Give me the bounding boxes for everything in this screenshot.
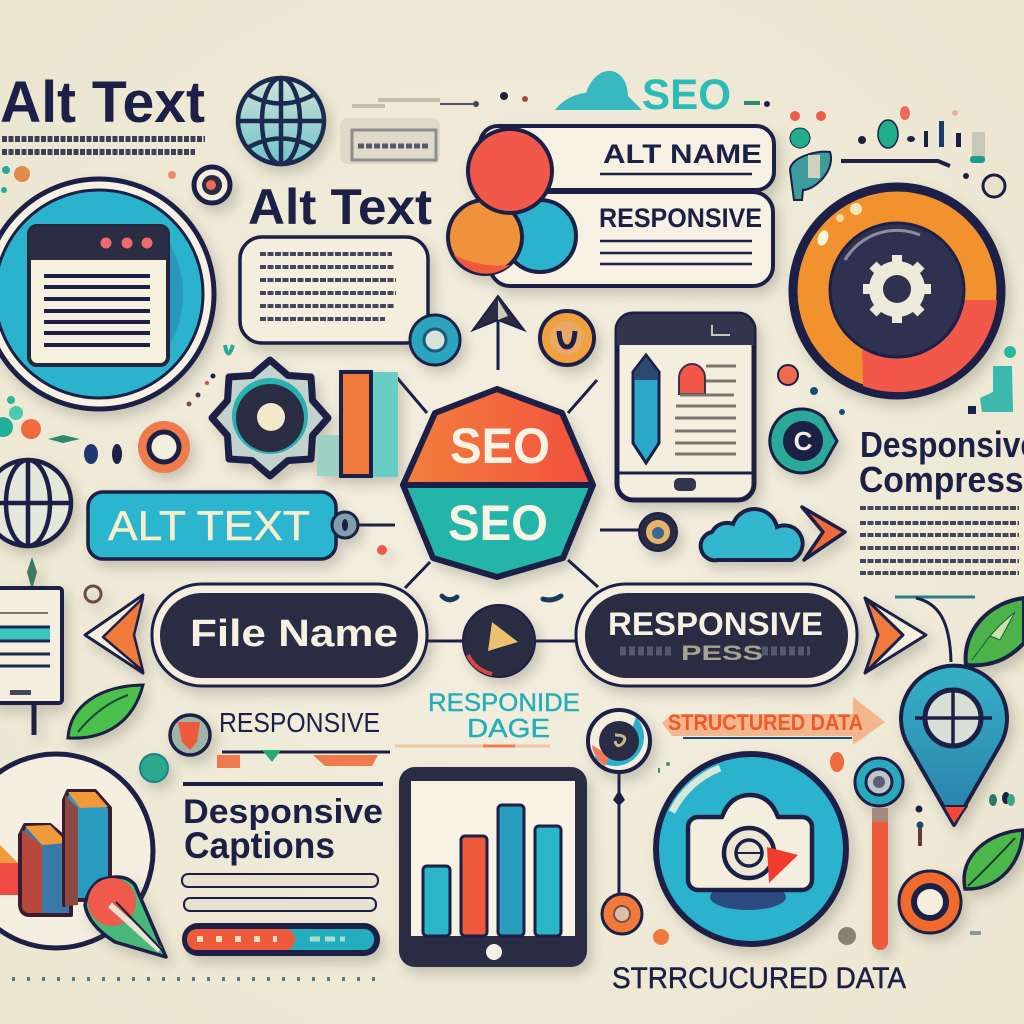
- icon: small ring: [194, 167, 230, 203]
- heading: Desponsive Captions: Captions: [184, 825, 335, 866]
- small blurred label top: [340, 100, 440, 164]
- connector lines: [357, 104, 640, 895]
- document left: [0, 557, 62, 735]
- heading: Desponsive Compression right: [859, 424, 1024, 573]
- dots right: [778, 346, 1016, 415]
- icon: teal C circle: C: [794, 426, 813, 456]
- icon: gear left: [212, 360, 328, 476]
- pill: Responsive: PESS: [681, 642, 763, 665]
- decorative cluster top right: [790, 106, 1005, 200]
- icon: orange ring left: [84, 421, 190, 473]
- icon: leaf left: [68, 685, 143, 738]
- heading: Alt Text top left: Alt Text: [0, 70, 205, 135]
- icon: gear in orange circle: [793, 187, 1001, 395]
- arrow label: Structured Data: STRUCTURED DATA: [668, 710, 863, 735]
- text box: [240, 237, 428, 343]
- label: Responide Dage: DAGE: [467, 713, 550, 743]
- pills: Alt Name and Responsive with circles: [448, 126, 774, 286]
- icon: globe left: [0, 460, 71, 546]
- arrow up: [473, 296, 524, 330]
- icon: orange ring bottom right: [899, 871, 961, 933]
- icon: pen tool: [85, 877, 166, 957]
- badge: SEO hexagon: SEO: [450, 418, 550, 474]
- ticks above dark circle: [442, 596, 561, 600]
- pill: File Name: [152, 584, 427, 686]
- heading: Desponsive Captions: [182, 784, 383, 911]
- decorative dots top left: [1, 166, 176, 193]
- top SEO cloud: [555, 71, 731, 119]
- decorative dots near gear: [186, 345, 233, 406]
- icon: camera in teal circle: [656, 754, 846, 944]
- icon: map pin: [901, 666, 1007, 825]
- decorative dots near pin: [916, 792, 1015, 935]
- label: Responsive with underline: [217, 707, 390, 768]
- pills: Alt Name and Responsive with circles: ALT NAME: [603, 139, 762, 169]
- tablet bar chart: [399, 767, 587, 967]
- pill: ALT TEXT teal: [88, 492, 387, 559]
- badge: SEO hexagon: SEO: [448, 495, 548, 551]
- icon: leaf bottom right: [964, 830, 1023, 889]
- label: Responide Dage: [395, 689, 580, 746]
- icon: teal ring: [410, 315, 460, 365]
- icon: thermometer stem: [855, 758, 903, 950]
- label: Responide Dage: RESPONIDE: [428, 689, 580, 717]
- pill: Responsive: [576, 584, 857, 686]
- icon: globe top: [238, 78, 324, 164]
- icon: orange ring: [540, 311, 594, 365]
- heading: Desponsive Captions: Desponsive: [183, 793, 383, 831]
- icon: responsive ring: [170, 715, 210, 755]
- label: Responsive with underline: RESPONSIVE: [219, 707, 380, 738]
- top SEO cloud: SEO: [642, 71, 731, 119]
- badge: SEO hexagon: [403, 389, 593, 577]
- label: Structured Data bottom: STRRCUCURED DATA: [612, 962, 906, 995]
- icon: target circle with stem: [588, 710, 650, 772]
- icon: tablet with document: [617, 314, 754, 500]
- pill: File Name: File Name: [190, 613, 398, 655]
- icon: leaf top right: [895, 597, 1024, 665]
- pill: ALT TEXT teal: ALT TEXT: [108, 502, 310, 549]
- stem diamond and ring: [602, 752, 856, 945]
- icon: cloud: [701, 509, 803, 560]
- arrow chevron right: [802, 507, 845, 560]
- chart circle left: [0, 754, 153, 948]
- pill: Responsive: RESPONSIVE: [608, 606, 823, 642]
- arrow label: Structured Data: [662, 697, 885, 745]
- heading: Alt Text centre: Alt Text: [248, 179, 432, 235]
- icon: teal C circle: [770, 409, 837, 473]
- bar pair: [317, 372, 398, 477]
- icon: dark circle with play: [463, 605, 535, 677]
- decorative dots top centre: [473, 92, 770, 107]
- icon: teal small circle: [140, 754, 168, 782]
- icon: small ring right of badge: [639, 513, 677, 551]
- panel: browser window in circle: [0, 179, 214, 409]
- arrow left: [85, 586, 143, 673]
- dots along bottom: [12, 977, 385, 981]
- progress bar: [182, 923, 380, 956]
- pills: Alt Name and Responsive with circles: RESPONSIVE: [599, 203, 762, 233]
- arrow right chevrons: [865, 598, 926, 673]
- decorative left dots: [0, 396, 80, 443]
